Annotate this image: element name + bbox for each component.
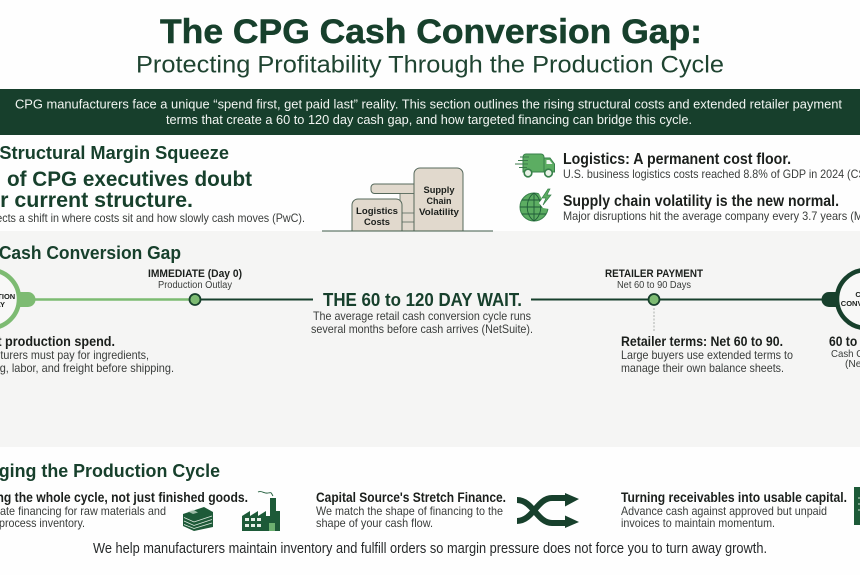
text block: logistics cost floor xyxy=(563,151,860,181)
text block: logistics cost floor: Logistics: A permanent cost floor. xyxy=(563,151,791,168)
timeline track xyxy=(30,298,830,301)
text block: turning receivables into capital xyxy=(621,490,847,530)
milestone: immediate day 0: Production Outlay xyxy=(158,280,232,291)
text block: financing the whole cycle xyxy=(0,490,248,530)
text block: retailer terms: manage their own balance sheets. xyxy=(621,361,784,375)
title: Protecting Profitability Through the Production Cycle xyxy=(136,52,724,78)
title xyxy=(136,13,724,78)
milestone: immediate day 0 xyxy=(148,268,242,305)
illustration: cost blocks: Logistics xyxy=(356,206,398,217)
illustration: cost blocks xyxy=(322,168,493,231)
illustration: cost blocks: Supply xyxy=(424,185,455,196)
text block: stretch finance: shape of your cash flow. xyxy=(316,516,433,530)
milestone: retailer payment: Net 60 to 90 Days xyxy=(617,280,691,291)
text block: retailer terms: Retailer terms: Net 60 to 90. xyxy=(621,334,783,349)
text block: turning receivables into capital: invoices to maintain momentum. xyxy=(621,516,775,530)
illustration: cost blocks: Chain xyxy=(426,196,452,207)
icon: factory xyxy=(242,491,280,531)
end circle: cash conversion xyxy=(822,270,860,328)
text block: financing the whole cycle: process inventory. xyxy=(0,516,85,530)
start circle: production outlay xyxy=(0,270,36,328)
text block: upfront production spend xyxy=(0,334,174,375)
milestone: immediate day 0: IMMEDIATE (Day 0) xyxy=(148,268,242,280)
callout: executives doubt structure xyxy=(0,168,305,225)
illustration: cost blocks: Costs xyxy=(364,217,390,228)
intro banner xyxy=(0,89,860,135)
panel: bridging the production cycle xyxy=(0,461,860,557)
callout: 60 to 120 day wait: The average retail cash conversion cycle runs xyxy=(313,309,531,323)
text block: financing the whole cycle: ate financing for raw materials and xyxy=(0,504,166,518)
intro banner: CPG manufacturers face a unique “spend first, get paid last” reality. This section outlines the rising structural costs and extended retailer payment xyxy=(15,98,843,112)
text block: turning receivables into capital: Advance cash against approved but unpaid xyxy=(621,504,827,518)
panel: structural margin squeeze xyxy=(0,143,860,231)
text block: stretch finance: We match the shape of financing to the xyxy=(316,504,503,518)
text block: stretch finance xyxy=(316,490,506,530)
icon: cash stack xyxy=(183,507,213,531)
text block: retailer terms xyxy=(621,334,793,375)
icon: invoice document xyxy=(854,487,860,525)
text block: supply chain volatility xyxy=(563,193,860,223)
icon: cracked globe with lightning xyxy=(520,189,551,221)
callout: 60 to 120 day wait xyxy=(311,290,533,336)
text block: retailer terms: Large buyers use extended terms to xyxy=(621,348,793,362)
milestone: retailer payment: RETAILER PAYMENT xyxy=(605,268,703,280)
intro banner: terms that create a 60 to 120 day cash gap, and how targeted financing can bridge this cycle. xyxy=(166,113,692,127)
footer statement: We help manufacturers maintain inventory and fulfill orders so margin pressure does not force you to turn away growth. xyxy=(93,541,767,557)
title: The CPG Cash Conversion Gap: xyxy=(160,13,702,51)
callout: 60 to 120 day wait: THE 60 to 120 DAY WAIT. xyxy=(323,290,522,310)
callout: 60 to 120 day wait: several months before cash arrives (NetSuite). xyxy=(311,322,533,336)
icon: shuffle arrows xyxy=(517,493,579,528)
milestone: retailer payment xyxy=(605,268,703,331)
callout: executives doubt structure: of CPG executives doubt xyxy=(7,168,252,191)
text block: supply chain volatility: Supply chain volatility is the new normal. xyxy=(563,193,839,210)
illustration: cost blocks: Volatility xyxy=(419,207,460,218)
icon: delivery truck xyxy=(515,154,554,177)
text block: stretch finance: Capital Source's Stretch Finance. xyxy=(316,490,506,505)
panel: cash conversion gap xyxy=(0,243,860,375)
text block: 60 to 120 days xyxy=(829,334,860,370)
